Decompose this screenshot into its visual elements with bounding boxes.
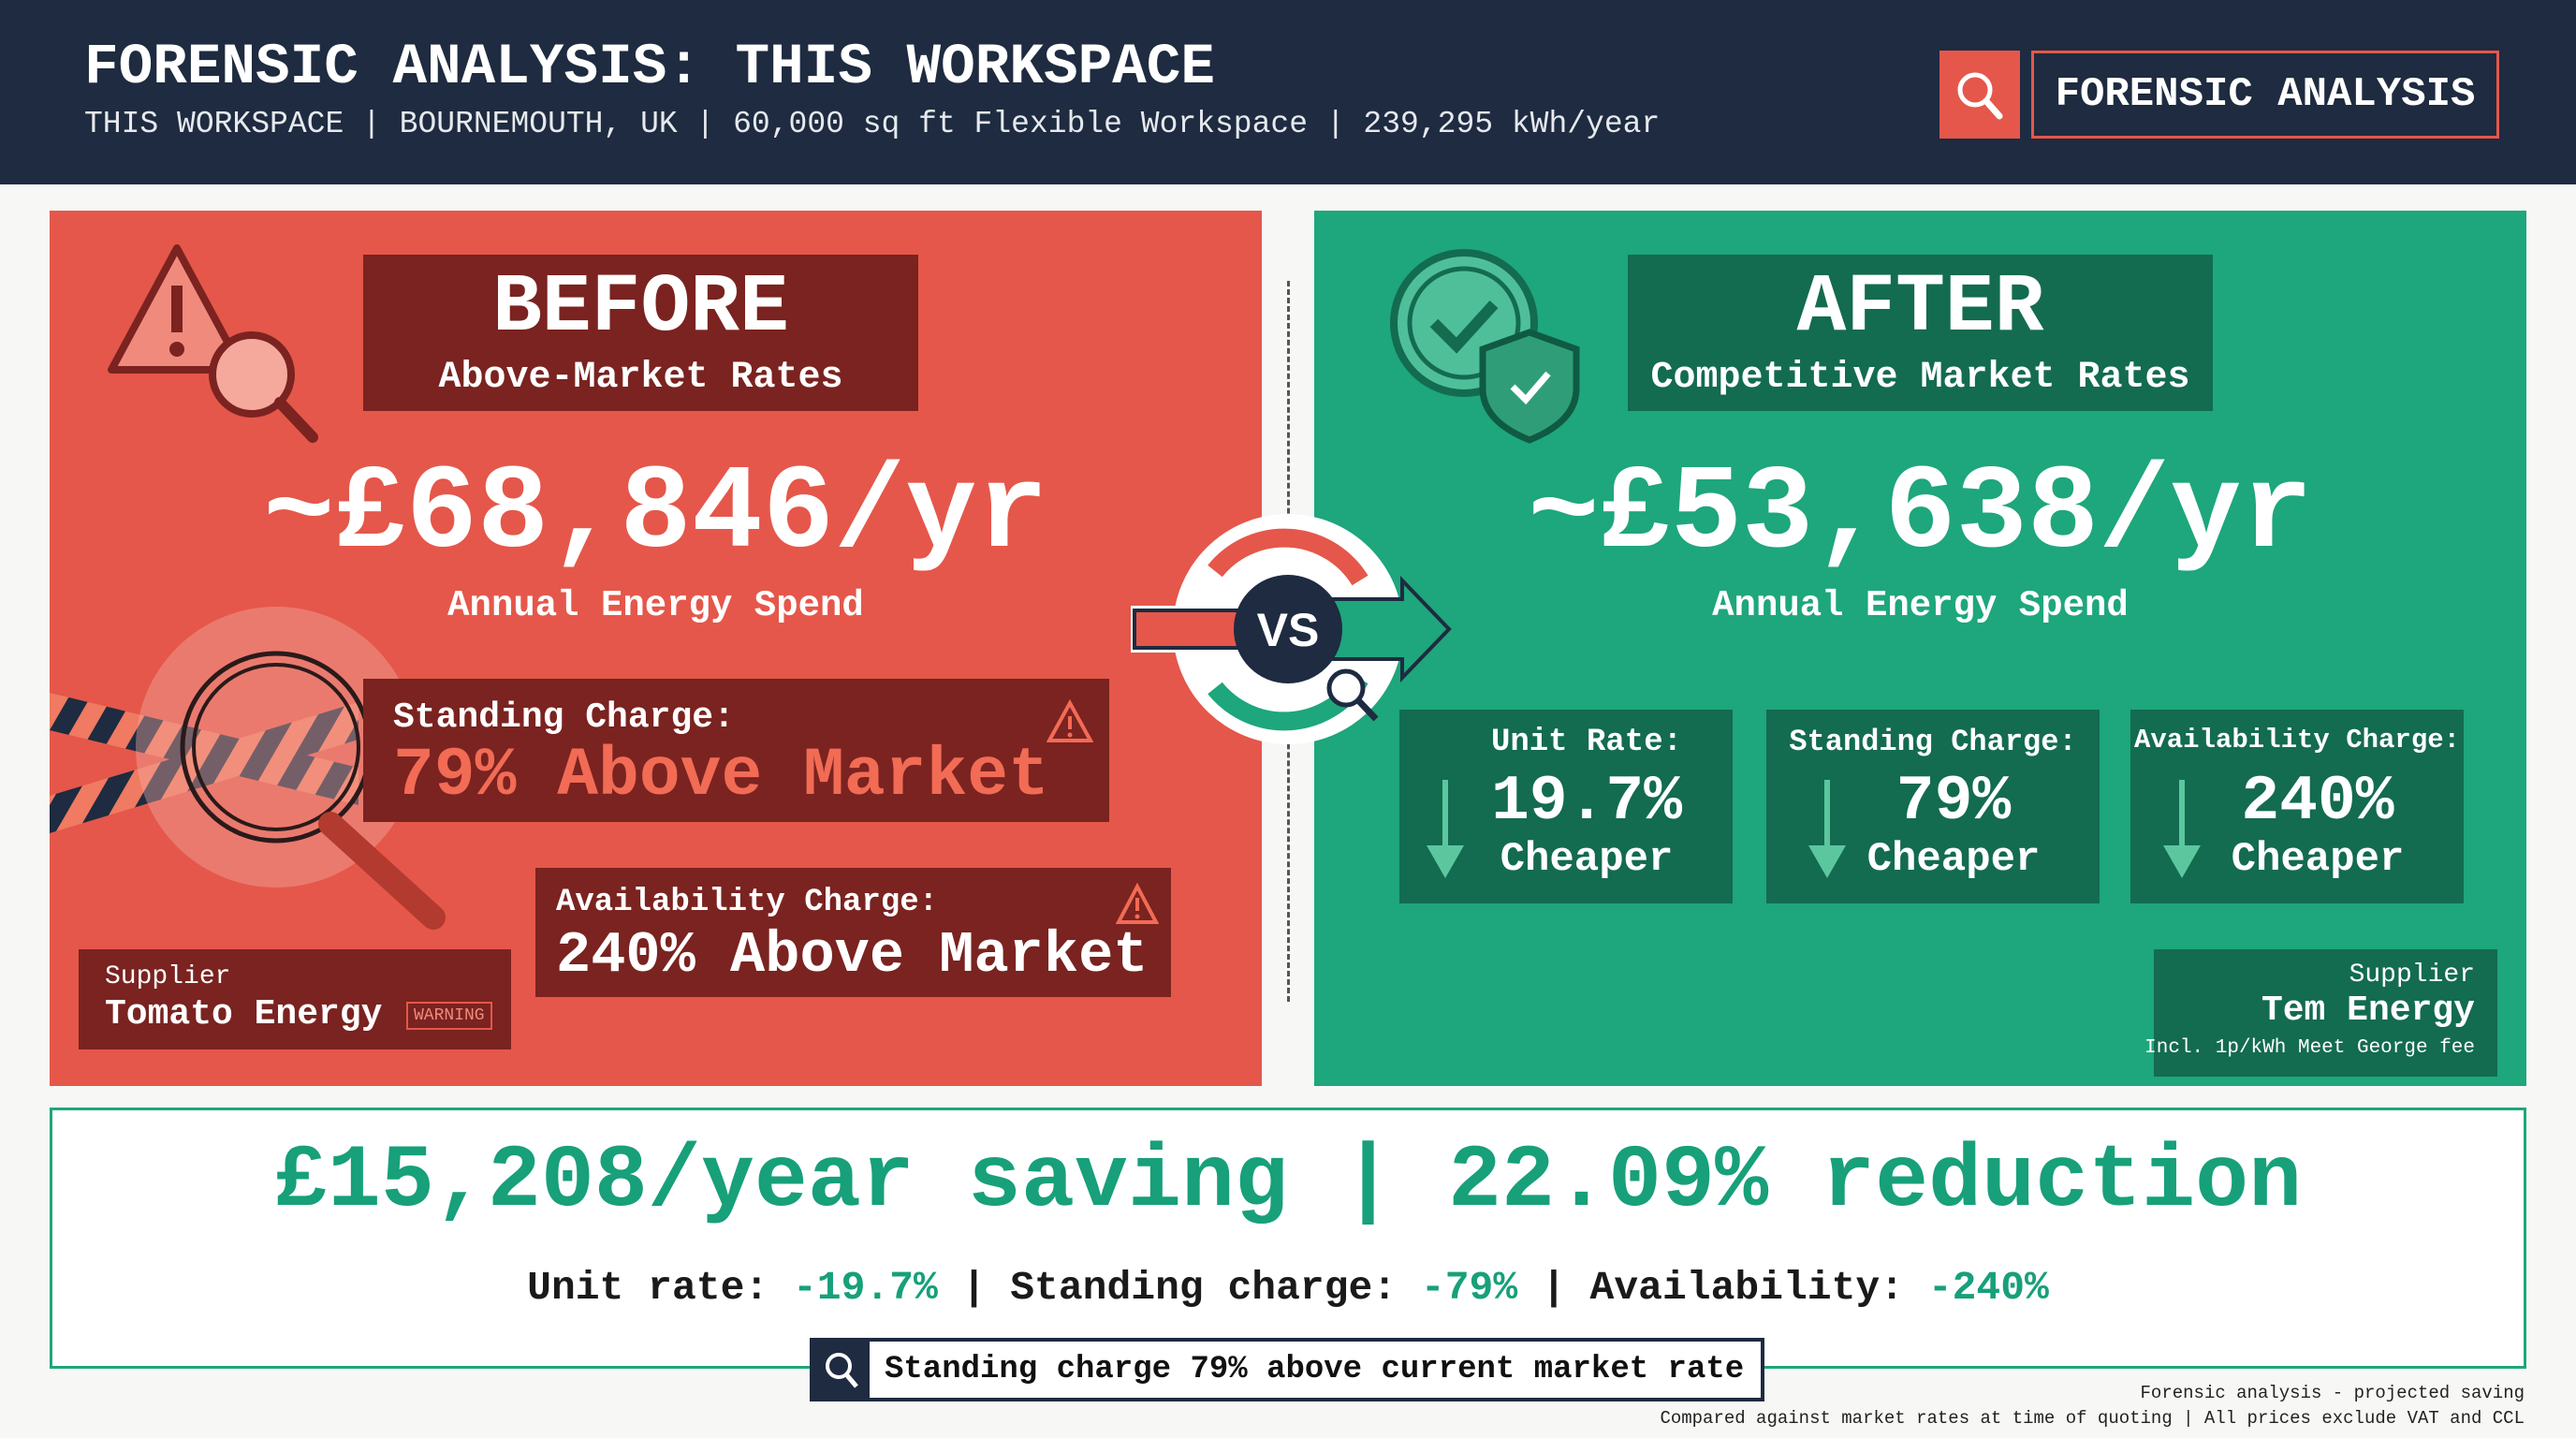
icon: check and shield bbox=[1390, 249, 1580, 444]
card: standing charge: Standing Charge: bbox=[1789, 725, 2077, 759]
card: standing charge: Cheaper bbox=[1867, 836, 2040, 883]
callout: availability charge: 240% Above Market bbox=[556, 922, 1149, 989]
panel: after bbox=[1314, 211, 2526, 1086]
before label: Above-Market Rates bbox=[438, 357, 843, 399]
callout: standing charge note bbox=[810, 1338, 1764, 1401]
supplier: tem energy: Incl. 1p/kWh Meet George fee bbox=[2144, 1037, 2475, 1059]
card: unit rate: 19.7% bbox=[1491, 766, 1682, 838]
before subtitle: Annual Energy Spend bbox=[447, 585, 864, 626]
panel: before bbox=[50, 211, 1262, 1086]
icon: vs badge bbox=[1131, 514, 1452, 744]
card: availability charge bbox=[2130, 710, 2464, 903]
supplier: tomato energy: Supplier bbox=[105, 962, 230, 991]
title: FORENSIC ANALYSIS: THIS WORKSPACE bbox=[84, 36, 1215, 100]
icon: warning bbox=[1046, 699, 1093, 742]
card: availability charge: Availability Charge: bbox=[2134, 725, 2460, 756]
icon: vs badge: VS bbox=[1257, 604, 1319, 656]
card: unit rate: Unit Rate: bbox=[1491, 725, 1682, 760]
supplier: tem energy: Supplier bbox=[2349, 961, 2475, 990]
subtitle: THIS WORKSPACE | BOURNEMOUTH, UK | 60,000 sq ft Flexible Workspace | 239,295 kWh/year bbox=[84, 107, 1660, 141]
saving headline: £15,208/year saving | 22.09% reduction bbox=[274, 1131, 2302, 1232]
callout: availability charge bbox=[535, 868, 1171, 997]
after label: AFTER bbox=[1796, 262, 2044, 355]
footnotes: Forensic analysis - projected saving bbox=[2141, 1383, 2525, 1403]
badge: forensic analysis bbox=[1939, 51, 2499, 139]
callout: availability charge: Availability Charge: bbox=[556, 885, 938, 920]
header bar bbox=[0, 0, 2576, 184]
breakdown line: Unit rate: -19.7% | Standing charge: -79% | Availability: -240% bbox=[527, 1265, 2049, 1311]
before label bbox=[363, 255, 918, 411]
after amount: ~£53,638/yr bbox=[1528, 448, 2313, 582]
after subtitle: Annual Energy Spend bbox=[1712, 585, 2129, 626]
supplier: tomato energy bbox=[79, 949, 511, 1049]
card: availability charge: Cheaper bbox=[2232, 836, 2404, 883]
divider bbox=[1287, 281, 1290, 1002]
icon: warning bbox=[1116, 883, 1159, 924]
card: unit rate bbox=[1399, 710, 1733, 903]
icon: warning with magnifier bbox=[108, 244, 318, 443]
before amount: ~£68,846/yr bbox=[263, 448, 1048, 582]
badge label: FORENSIC ANALYSIS bbox=[2056, 71, 2475, 118]
supplier: tomato energy: Tomato Energy bbox=[105, 994, 382, 1034]
summary box bbox=[50, 1108, 2526, 1369]
card: standing charge: 79% bbox=[1896, 766, 2011, 838]
before label: BEFORE bbox=[492, 262, 789, 355]
icon: magnifier over tape bbox=[50, 607, 446, 930]
supplier: tem energy: Tem Energy bbox=[2261, 990, 2475, 1031]
after label: Competitive Market Rates bbox=[1650, 357, 2190, 399]
icon: magnifier bbox=[1939, 51, 2020, 139]
callout: standing charge bbox=[363, 679, 1109, 822]
supplier: tomato energy: WARNING bbox=[414, 1006, 485, 1025]
supplier: tem energy bbox=[2154, 949, 2497, 1077]
footnotes bbox=[1660, 1383, 2525, 1429]
callout: standing charge: 79% Above Market bbox=[393, 737, 1049, 814]
card: availability charge: 240% bbox=[2241, 766, 2394, 838]
callout: standing charge: Standing Charge: bbox=[393, 697, 735, 738]
card: standing charge bbox=[1766, 710, 2100, 903]
card: unit rate: Cheaper bbox=[1500, 836, 1673, 883]
after label bbox=[1628, 255, 2213, 411]
badge label bbox=[2031, 51, 2499, 139]
footnotes: Compared against market rates at time of quoting | All prices exclude VAT and CCL bbox=[1660, 1408, 2525, 1429]
callout: standing charge note: Standing charge 79% above current market rate bbox=[885, 1352, 1744, 1387]
